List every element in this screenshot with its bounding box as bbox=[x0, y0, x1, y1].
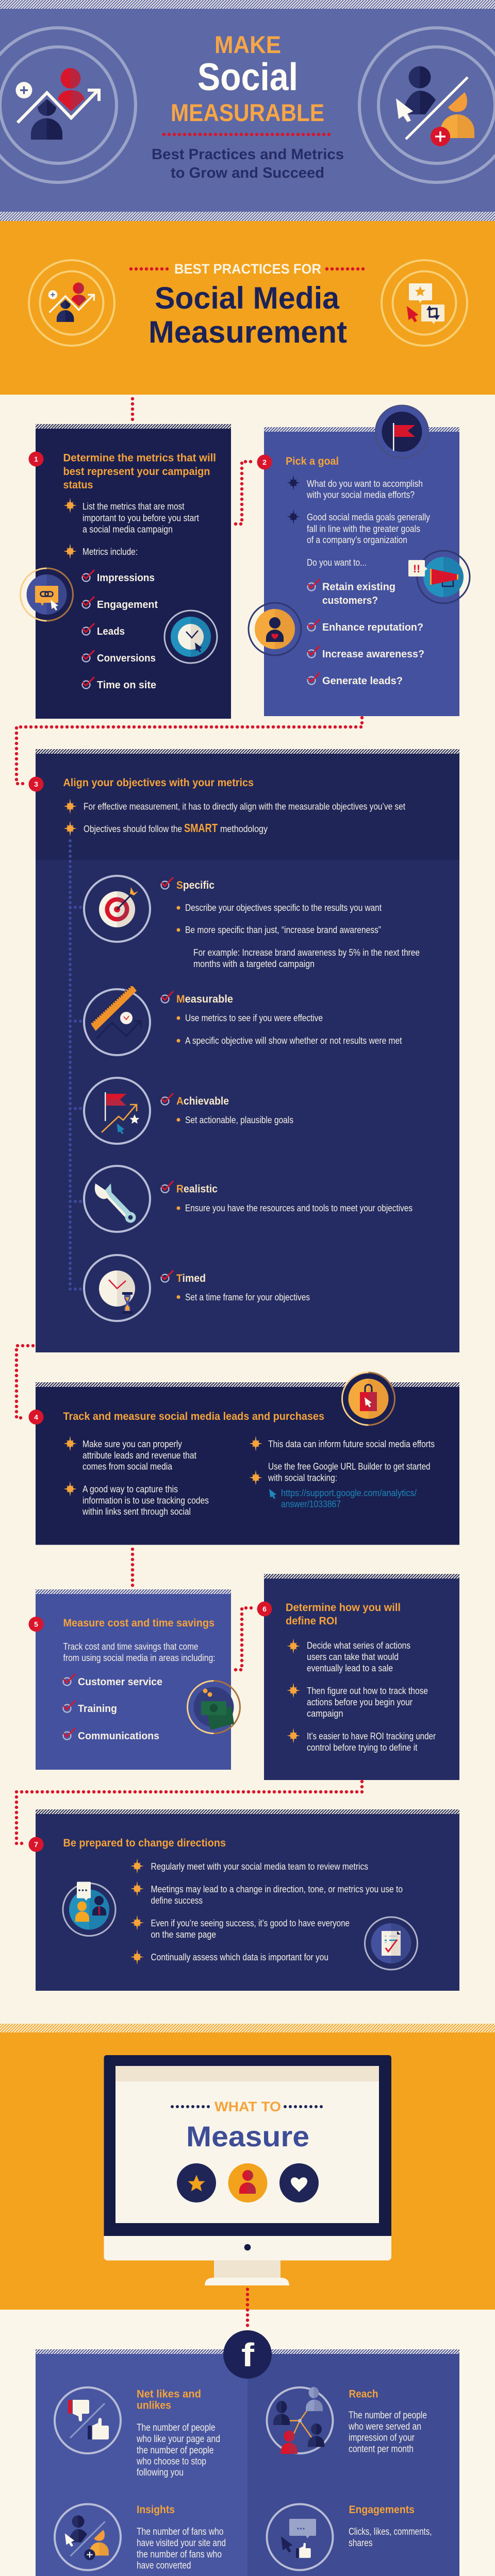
item: specific: Describe your objectives specific to the results you want bbox=[185, 903, 382, 913]
left bullets: within links sent through social bbox=[82, 1506, 191, 1517]
heading bbox=[131, 261, 365, 349]
item: achievable: Set actionable, plausible goals bbox=[185, 1115, 293, 1125]
subtitle: to Grow and Succeed bbox=[171, 165, 324, 181]
header banner bbox=[0, 0, 495, 221]
goals checklist: Increase awareness? bbox=[322, 649, 424, 660]
right bullets: This data can inform future social media efforts bbox=[268, 1439, 435, 1449]
goals checklist: customers? bbox=[322, 595, 378, 606]
item: measurable: Measurable bbox=[176, 993, 233, 1005]
bullet text: Do you want to... bbox=[307, 557, 367, 568]
metrics checklist: Conversions bbox=[97, 653, 156, 664]
icon: bubble, cursor, thumb bbox=[267, 2504, 333, 2570]
number 2 bbox=[257, 454, 272, 470]
item: specific: For example: Increase brand awareness by 5% in the next three bbox=[193, 947, 420, 958]
intro bullets: SMART bbox=[184, 821, 218, 835]
metric: engagements: Clicks, likes, comments, bbox=[349, 2527, 432, 2537]
item: specific: Specific bbox=[176, 879, 214, 891]
connector bbox=[236, 1608, 253, 1670]
connector bbox=[246, 2290, 249, 2327]
right bullets: with social tracking: bbox=[268, 1472, 337, 1483]
icon: network bbox=[267, 2387, 333, 2454]
bullet list text: a social media campaign bbox=[82, 524, 173, 535]
number 3 bbox=[29, 777, 43, 791]
bullets: users can take that would bbox=[307, 1652, 399, 1662]
item: measurable bbox=[84, 985, 402, 1055]
metrics checklist: Impressions bbox=[97, 572, 155, 584]
metric: net likes and unlikes: unlikes bbox=[137, 2400, 171, 2411]
metric: engagements: shares bbox=[349, 2538, 372, 2549]
heading: Determine the metrics that will bbox=[63, 452, 216, 464]
heading bbox=[286, 1602, 401, 1627]
metric: insights bbox=[55, 2504, 226, 2571]
left bullets: information is to use tracking codes bbox=[82, 1495, 209, 1505]
item: timed bbox=[84, 1255, 310, 1321]
metric: engagements: Engagements bbox=[349, 2504, 415, 2516]
goals checklist: Generate leads? bbox=[322, 675, 403, 687]
bullets: define success bbox=[151, 1895, 203, 1906]
bullets: Even if you’re seeing success, it’s good to have everyone bbox=[151, 1918, 350, 1928]
goals checklist bbox=[307, 579, 424, 687]
metric: net likes and unlikes: The number of people bbox=[137, 2422, 216, 2433]
intro bullets: methodology bbox=[220, 824, 268, 834]
savings checklist: Customer service bbox=[78, 1676, 162, 1688]
subtitle bbox=[152, 146, 344, 181]
panel: facebook metrics bbox=[36, 2330, 459, 2576]
item: timed: Timed bbox=[176, 1273, 206, 1284]
text block bbox=[63, 1641, 216, 1663]
item: realistic bbox=[84, 1166, 412, 1232]
bullet list text: Metrics include: bbox=[82, 547, 138, 557]
section header: best practices bbox=[0, 221, 495, 395]
bullets: It’s easier to have ROI tracking under bbox=[307, 1731, 436, 1741]
connector bbox=[16, 718, 362, 784]
icon: target bbox=[84, 876, 150, 942]
bullet text bbox=[287, 475, 430, 568]
heading: Align your objectives with your metrics bbox=[63, 777, 254, 789]
heading: BEST PRACTICES FOR bbox=[174, 261, 321, 277]
metric: reach bbox=[267, 2387, 427, 2454]
number 5 bbox=[29, 1617, 43, 1632]
item: achievable: Achievable bbox=[176, 1095, 229, 1107]
number 7: 7 bbox=[34, 1840, 38, 1849]
heading: best represent your campaign bbox=[63, 466, 210, 478]
item: realistic: Realistic bbox=[176, 1183, 218, 1195]
bullets: control before trying to define it bbox=[307, 1742, 418, 1753]
metric: insights: have converted bbox=[137, 2561, 191, 2571]
icon: link bubble bbox=[21, 568, 73, 621]
icon: growth in rings bbox=[29, 260, 114, 346]
item: measurable: Use metrics to see if you were effective bbox=[185, 1013, 323, 1023]
metric: net likes and unlikes: Net likes and bbox=[137, 2388, 201, 2400]
bullet list text bbox=[63, 498, 199, 559]
icon: megaphone: !! bbox=[413, 563, 420, 575]
icon: chat in rings bbox=[382, 260, 467, 346]
bullet text: fall in line with the greater goals bbox=[307, 523, 420, 534]
icon: clock bbox=[164, 611, 217, 663]
metrics checklist: Time on site bbox=[97, 680, 156, 691]
number 4: 4 bbox=[34, 1413, 38, 1421]
metrics checklist: Engagement bbox=[97, 599, 158, 611]
connector bbox=[131, 399, 134, 420]
heading: Track and measure social media leads and purchases bbox=[63, 1411, 324, 1422]
item: specific: Be more specific than just, “increase brand awareness” bbox=[185, 925, 381, 935]
icon: flag and arrow bbox=[84, 1078, 150, 1144]
bullets bbox=[287, 1638, 436, 1753]
panel: step 1 determine metrics bbox=[21, 424, 231, 719]
metrics checklist: Leads bbox=[97, 626, 125, 637]
number 1: 1 bbox=[34, 455, 38, 463]
bullets: Then figure out how to track those bbox=[307, 1686, 428, 1696]
metric: reach: The number of people bbox=[349, 2410, 427, 2421]
icon: person with heart bbox=[249, 603, 301, 655]
icon: document bbox=[365, 1917, 418, 1970]
left bullets: Make sure you can properly bbox=[82, 1439, 182, 1449]
metric: reach: content per month bbox=[349, 2444, 414, 2454]
bullets: actions before you begin your bbox=[307, 1697, 412, 1707]
icon: facebook: f bbox=[241, 2336, 255, 2374]
bullet text: What do you want to accomplish bbox=[307, 479, 423, 489]
icon: facebook bbox=[223, 2330, 272, 2379]
bullets: Meetings may lead to a change in direction, tone, or metrics you use to bbox=[151, 1884, 403, 1894]
title: MEASURABLE bbox=[171, 99, 324, 126]
icon: money bbox=[188, 1681, 240, 1733]
metric: net likes and unlikes: who like your page and bbox=[136, 2434, 220, 2445]
left bullets: A good way to capture this bbox=[82, 1484, 178, 1494]
item: achievable bbox=[84, 1078, 293, 1144]
metric: net likes and unlikes: following you bbox=[137, 2467, 184, 2478]
bullets: campaign bbox=[307, 1708, 343, 1719]
left bullets: comes from social media bbox=[82, 1461, 173, 1471]
what to heading bbox=[172, 2099, 323, 2153]
heading: Measurement bbox=[148, 315, 347, 349]
text block: Track cost and time savings that come bbox=[63, 1641, 198, 1652]
metric: reach: Reach bbox=[349, 2388, 378, 2400]
panel: step 6 define ROI bbox=[257, 1574, 459, 1780]
title bbox=[164, 31, 332, 134]
metric: insights: have visited your site and bbox=[137, 2538, 226, 2549]
number 3: 3 bbox=[34, 780, 38, 788]
icon: shopping bag bbox=[342, 1372, 395, 1425]
metric: net likes and unlikes: who choose to stop bbox=[136, 2456, 206, 2467]
bullets bbox=[130, 1858, 403, 1965]
number 7 bbox=[29, 1837, 43, 1852]
bullet text: of a company’s organization bbox=[307, 535, 407, 545]
savings checklist: Training bbox=[78, 1703, 117, 1715]
heading: status bbox=[63, 479, 93, 491]
right bullets: Use the free Google URL Builder to get started bbox=[268, 1461, 430, 1471]
panel: step 4 track and measure bbox=[29, 1372, 459, 1545]
number 5: 5 bbox=[34, 1620, 38, 1628]
metric: insights: Insights bbox=[137, 2504, 175, 2516]
goals checklist: Enhance reputation? bbox=[322, 622, 423, 633]
bullets: on the same page bbox=[151, 1929, 216, 1940]
metric: reach: impression of your bbox=[349, 2433, 415, 2443]
item: measurable: A specific objective will show whether or not results were met bbox=[185, 1036, 402, 1046]
number 6: 6 bbox=[262, 1605, 267, 1613]
left bullets bbox=[63, 1436, 209, 1517]
bullet list text: important to you before you start bbox=[82, 513, 199, 523]
panel: step 7 change directions bbox=[29, 1809, 459, 1991]
icon: wrench bbox=[84, 1166, 150, 1232]
icon: ruler bbox=[84, 985, 150, 1055]
metric: engagements bbox=[267, 2504, 432, 2570]
bullets: eventually lead to a sale bbox=[307, 1663, 393, 1673]
right bullets: https://support.google.com/analytics/ bbox=[281, 1488, 417, 1498]
icon: people split bbox=[55, 2504, 121, 2570]
goals checklist: Retain existing bbox=[322, 581, 395, 592]
bullets: Continually assess which data is important for you bbox=[151, 1952, 328, 1962]
section: what to measure bbox=[0, 2024, 495, 2576]
heading: Be prepared to change directions bbox=[63, 1837, 226, 1849]
metric: net likes and unlikes: the number of people bbox=[137, 2445, 213, 2456]
connector bbox=[16, 1782, 362, 1843]
icon: clock and hourglass bbox=[84, 1255, 150, 1321]
right bullets bbox=[249, 1436, 435, 1510]
number 6 bbox=[257, 1601, 272, 1617]
connector bbox=[131, 1549, 134, 1586]
heading: Social Media bbox=[155, 281, 340, 315]
savings checklist: Communications bbox=[78, 1731, 159, 1742]
icon: people growth rings bbox=[0, 28, 136, 182]
metrics checklist bbox=[82, 570, 158, 691]
metric: reach: who were served an bbox=[348, 2421, 421, 2432]
panel: step 2 pick a goal bbox=[249, 405, 470, 716]
bullet text: Good social media goals generally bbox=[307, 512, 430, 522]
heading: Measure cost and time savings bbox=[63, 1617, 214, 1629]
intro bullets: Objectives should follow the bbox=[84, 824, 182, 834]
number 4 bbox=[29, 1410, 43, 1425]
metric: net likes and unlikes bbox=[55, 2387, 220, 2478]
title: MAKE bbox=[214, 31, 281, 58]
connector bbox=[16, 1346, 33, 1418]
number 2: 2 bbox=[262, 458, 267, 466]
bullets: Decide what series of actions bbox=[307, 1640, 410, 1651]
what to heading: WHAT TO bbox=[214, 2099, 281, 2114]
item: realistic: Ensure you have the resources and tools to meet your objectives bbox=[185, 1203, 412, 1213]
heading: Pick a goal bbox=[286, 455, 339, 467]
what to heading: Measure bbox=[186, 2120, 309, 2153]
panel: step 3 align objectives bbox=[29, 749, 459, 1352]
icon: megaphone bbox=[408, 551, 470, 603]
metric: insights: the number of fans who bbox=[137, 2549, 222, 2560]
item: timed: Set a time frame for your objectives bbox=[185, 1292, 310, 1302]
title: Social bbox=[197, 55, 298, 98]
subtitle: Best Practices and Metrics bbox=[152, 146, 344, 163]
panel: step 5 cost and time savings bbox=[29, 1589, 240, 1770]
monitor bbox=[104, 2055, 391, 2285]
heading: Determine how you will bbox=[286, 1602, 401, 1614]
item: specific bbox=[84, 876, 420, 969]
icon: people split rings bbox=[359, 28, 495, 182]
bullet text: with your social media efforts? bbox=[306, 489, 415, 500]
icon: flag bbox=[375, 405, 428, 458]
heading bbox=[63, 452, 216, 491]
dotted spine bbox=[70, 841, 81, 1289]
intro bullets: For effective measurement, it has to directly align with the measurable objectives you’ve set bbox=[84, 802, 405, 812]
savings checklist bbox=[63, 1674, 162, 1742]
icon: team bbox=[63, 1882, 116, 1936]
connector bbox=[236, 462, 253, 524]
metric: insights: The number of fans who bbox=[137, 2527, 224, 2537]
heading: define ROI bbox=[286, 1615, 337, 1627]
bullet list text: List the metrics that are most bbox=[82, 501, 185, 512]
intro bullets bbox=[63, 799, 405, 836]
bullets: Regularly meet with your social media team to review metrics bbox=[151, 1861, 368, 1872]
text block: from using social media in areas including: bbox=[63, 1653, 216, 1663]
right bullets: answer/1033867 bbox=[281, 1499, 341, 1510]
icon: thumbs bbox=[55, 2387, 121, 2453]
left bullets: attribute leads and revenue that bbox=[82, 1450, 196, 1461]
item: specific: months with a targeted campaign bbox=[193, 959, 315, 969]
number 1 bbox=[29, 451, 43, 467]
